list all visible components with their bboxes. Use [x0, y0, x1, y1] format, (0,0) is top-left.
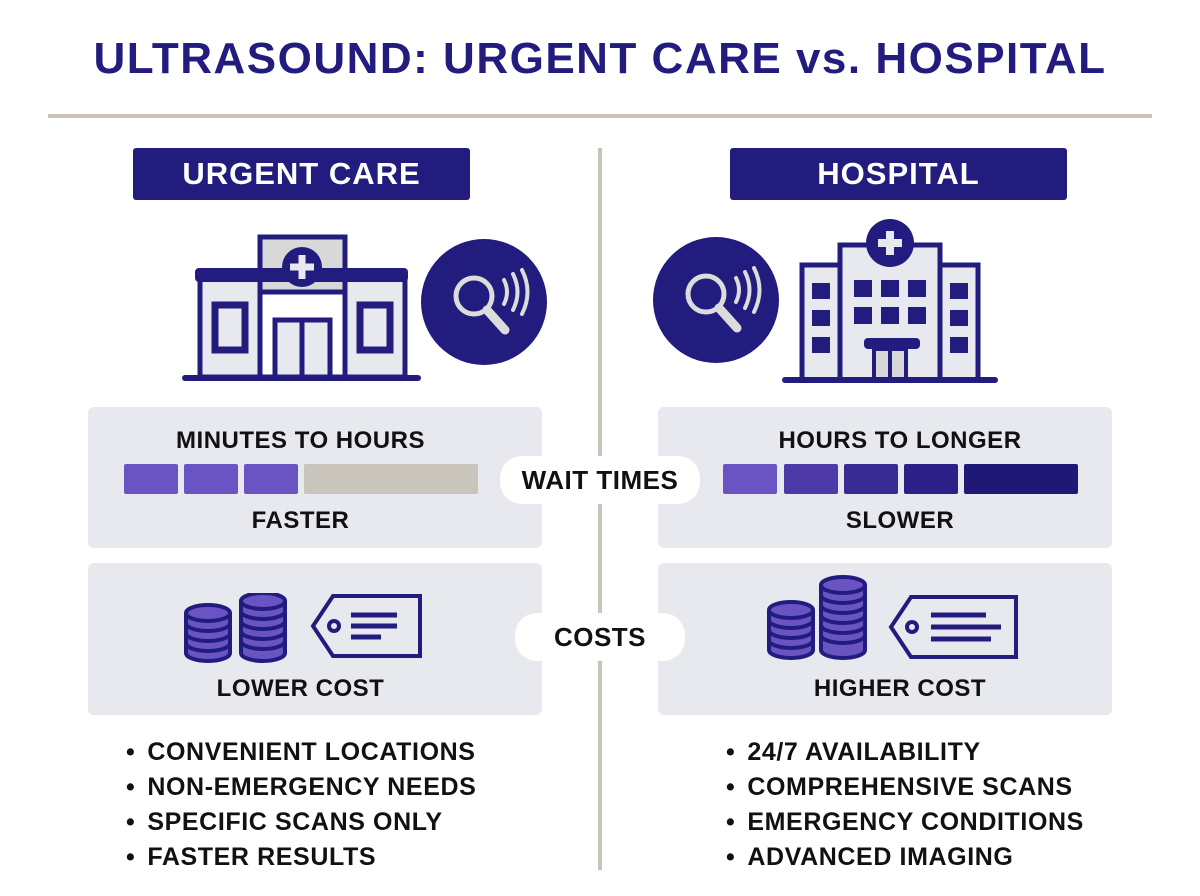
text: faster: FASTER	[252, 507, 349, 534]
list: hospital: EMERGENCY CONDITIONS	[747, 808, 1084, 836]
bar: urgent wait	[124, 464, 478, 494]
list: urgent care	[126, 738, 476, 871]
heading: hospital: HOSPITAL	[817, 156, 980, 191]
list: urgent care: SPECIFIC SCANS ONLY	[147, 808, 443, 836]
icon: hospital building	[782, 219, 998, 383]
panel: hospital wait	[658, 407, 1112, 548]
icon: coins and tag	[184, 593, 422, 663]
text: hours to longer: HOURS TO LONGER	[778, 427, 1022, 454]
title: ULTRASOUND: URGENT CARE vs. HOSPITAL	[93, 34, 1107, 83]
panel: hospital cost	[658, 563, 1112, 715]
icon: urgent care building	[182, 234, 421, 381]
text: minutes to hours: MINUTES TO HOURS	[176, 427, 425, 454]
text: higher cost: HIGHER COST	[814, 675, 986, 702]
list: urgent care: CONVENIENT LOCATIONS	[147, 738, 476, 766]
text: slower: SLOWER	[846, 507, 954, 534]
list: urgent care: FASTER RESULTS	[147, 843, 376, 871]
heading: hospital	[730, 148, 1067, 200]
text: lower cost: LOWER COST	[217, 675, 384, 702]
heading: urgent care	[133, 148, 470, 200]
list: hospital: 24/7 AVAILABILITY	[747, 738, 981, 766]
list: urgent care: NON-EMERGENCY NEEDS	[147, 773, 476, 801]
panel: urgent wait	[88, 407, 542, 548]
list: hospital: COMPREHENSIVE SCANS	[747, 773, 1073, 801]
label: costs: COSTS	[554, 622, 646, 652]
bar: hospital wait	[723, 464, 1078, 494]
list: hospital	[726, 738, 1084, 871]
panel: urgent cost	[88, 563, 542, 715]
label: wait times: WAIT TIMES	[522, 465, 678, 495]
icon: ultrasound left	[421, 239, 547, 365]
icon: ultrasound right	[653, 237, 779, 363]
label: wait times	[500, 456, 700, 504]
icon: coins and tag	[767, 575, 1018, 660]
label: costs	[515, 613, 685, 661]
heading: urgent care: URGENT CARE	[182, 156, 421, 191]
list: hospital: ADVANCED IMAGING	[747, 843, 1013, 871]
